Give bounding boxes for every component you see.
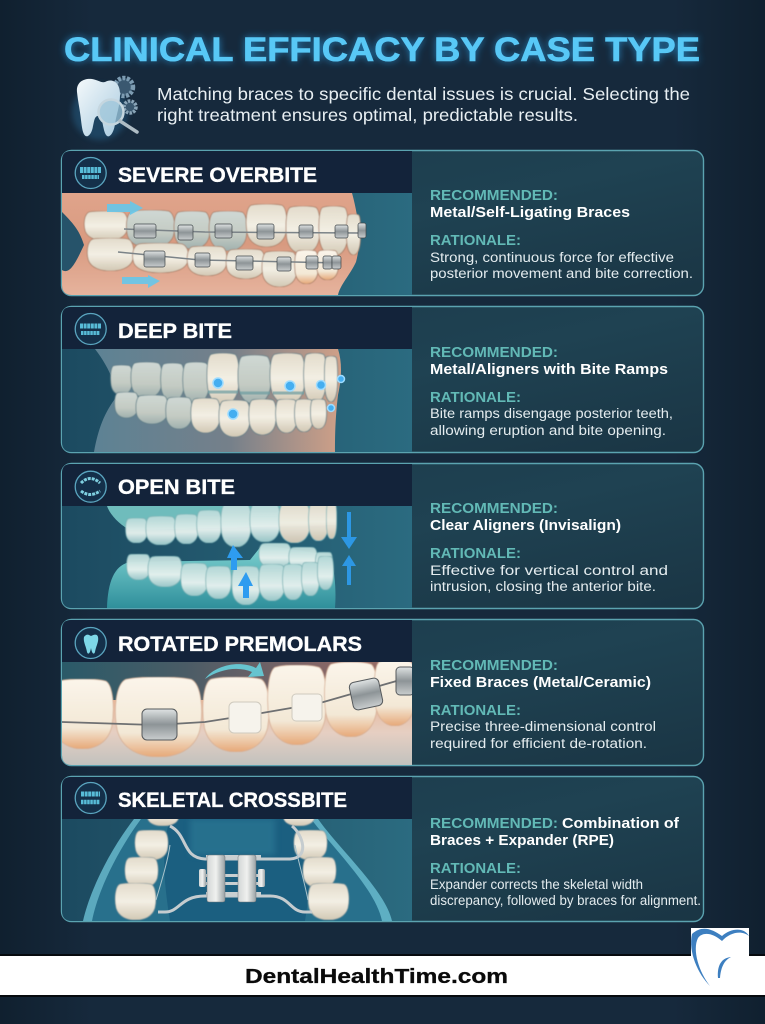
rationale: required for efficient de-rotation. xyxy=(430,736,647,751)
recommendation xyxy=(430,501,621,534)
rationale: Strong, continuous force for effective xyxy=(430,250,674,265)
intro text: Matching braces to specific dental issues is crucial. Selecting the xyxy=(157,84,690,104)
illustration: palatal expander xyxy=(62,819,412,921)
rationale: posterior movement and bite correction. xyxy=(430,266,693,281)
rationale: intrusion, closing the anterior bite. xyxy=(430,579,656,594)
icon: teeth badge xyxy=(75,314,106,344)
heading: OPEN BITE xyxy=(118,476,235,499)
recommendation: RECOMMENDED: xyxy=(430,345,558,361)
recommendation xyxy=(430,345,668,378)
icon: tooth with magnifier and gears xyxy=(72,78,137,140)
recommendation xyxy=(430,188,630,221)
rationale: RATIONALE: xyxy=(430,390,521,406)
rationale: RATIONALE: xyxy=(430,861,521,877)
panel: severe overbite xyxy=(62,150,704,296)
recommendation: Braces + Expander (RPE) xyxy=(430,833,614,849)
rationale xyxy=(430,861,701,908)
expander arms xyxy=(158,826,312,912)
panel: deep bite xyxy=(62,306,704,452)
arrow: rotation xyxy=(205,662,264,679)
rationale: Precise three-dimensional control xyxy=(430,719,656,734)
header bar xyxy=(62,307,412,349)
rationale: Expander corrects the skeletal width xyxy=(430,877,643,892)
rationale: Effective for vertical control and xyxy=(430,563,668,578)
illustration: rotated premolar braces xyxy=(52,660,416,765)
recommendation: RECOMMENDED: xyxy=(430,658,558,674)
heading: ROTATED PREMOLARS xyxy=(118,633,362,656)
footer band xyxy=(0,954,765,997)
rationale: allowing eruption and bite opening. xyxy=(430,423,666,438)
recommendation: Clear Aligners (Invisalign) xyxy=(430,518,621,534)
icon: teeth badge xyxy=(75,782,106,814)
illustration: deep bite aligners xyxy=(62,349,412,452)
rationale xyxy=(430,233,693,281)
recommendation: Fixed Braces (Metal/Ceramic) xyxy=(430,675,651,691)
arrows: vertical movement xyxy=(227,512,357,598)
rationale xyxy=(430,390,673,438)
illustration: severe overbite braces xyxy=(62,193,412,295)
recommendation: Metal/Aligners with Bite Ramps xyxy=(430,362,668,378)
recommendation: RECOMMENDED: xyxy=(430,188,558,204)
header bar xyxy=(62,464,412,506)
rationale xyxy=(430,703,656,751)
recommendation: Combination of xyxy=(562,816,679,832)
heading: SKELETAL CROSSBITE xyxy=(118,789,347,812)
icon: teeth badge xyxy=(75,158,106,188)
header bar xyxy=(62,777,412,819)
recommendation xyxy=(430,816,679,849)
illustration: open bite clear aligners xyxy=(62,503,412,608)
intro text xyxy=(157,84,690,125)
title: CLINICAL EFFICACY BY CASE TYPE xyxy=(64,31,700,69)
heading: DEEP BITE xyxy=(118,320,232,343)
recommendation: Metal/Self-Ligating Braces xyxy=(430,205,630,221)
rationale: RATIONALE: xyxy=(430,703,521,719)
logo: dental tooth xyxy=(691,928,749,986)
intro text: right treatment ensures optimal, predictable results. xyxy=(157,105,578,125)
rationale: RATIONALE: xyxy=(430,546,521,562)
panel: open bite xyxy=(62,464,704,608)
header bar xyxy=(62,620,412,662)
brackets xyxy=(142,667,414,740)
arrow: upper forward xyxy=(107,201,143,215)
recommendation xyxy=(430,658,651,691)
rationale: RATIONALE: xyxy=(430,233,521,249)
rationale: Bite ramps disengage posterior teeth, xyxy=(430,406,673,421)
arrow: lower forward xyxy=(122,275,160,288)
panel: rotated premolars xyxy=(52,620,704,766)
heading: SEVERE OVERBITE xyxy=(118,164,317,187)
recommendation: RECOMMENDED: xyxy=(430,501,558,517)
rationale: discrepancy, followed by braces for alignment. xyxy=(430,893,701,908)
icon: tooth badge xyxy=(75,628,106,658)
title: CLINICAL EFFICACY BY CASE TYPE xyxy=(64,31,700,69)
expander screw xyxy=(199,855,265,902)
recommendation: RECOMMENDED: xyxy=(430,816,558,832)
icon: teeth badge xyxy=(75,471,106,502)
website name: DentalHealthTime.com xyxy=(245,966,508,988)
rationale xyxy=(430,546,668,594)
panel: skeletal crossbite xyxy=(62,776,704,922)
header bar xyxy=(62,151,412,193)
icon: bite ramp dots xyxy=(213,376,344,419)
